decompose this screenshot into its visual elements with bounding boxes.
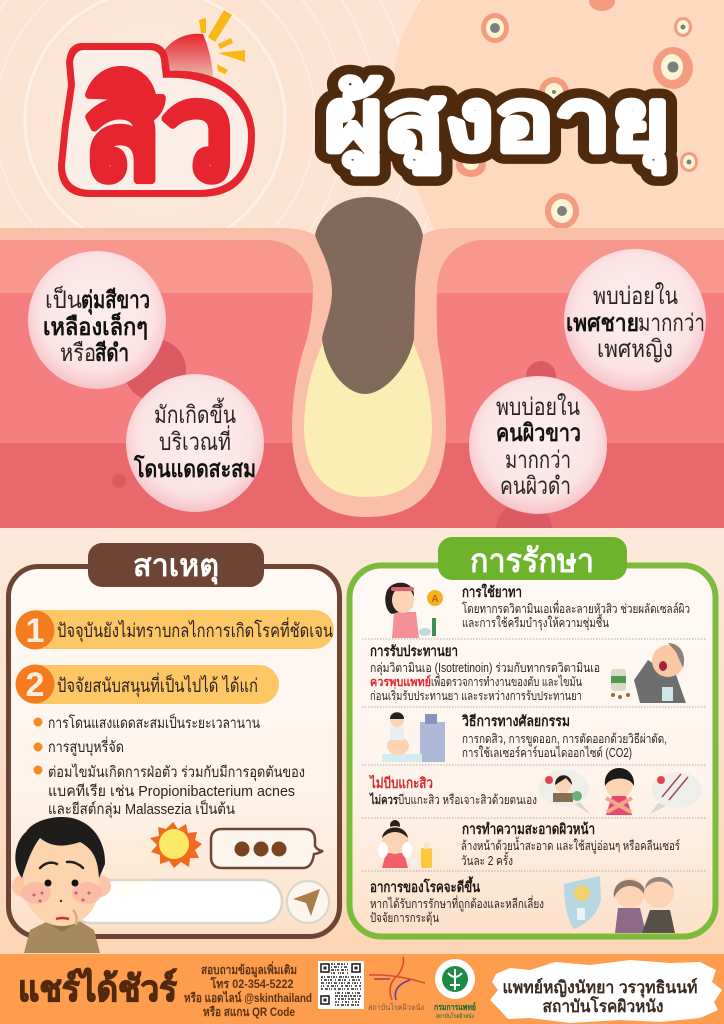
icon: woman applying cream: A xyxy=(431,594,439,605)
treatment dividers xyxy=(362,639,707,871)
callout bubble: sun-exposed areas: บริเวณที่ xyxy=(159,425,231,456)
QR code xyxy=(318,961,364,1009)
cause 2: ปัจจัยสนับสนุนที่เป็นไปได้ ได้แก่ xyxy=(57,672,258,698)
treatment: surgical procedures: การใช้เลเซอร์คาร์บอนไดออกไซด์ (CO2) xyxy=(462,746,632,760)
logo: Department of Medical Services xyxy=(434,959,476,1020)
treatment: do not squeeze: บีบแกะสิว หรือเจาะสิวด้วยตนเอง xyxy=(398,793,537,807)
heading: treatment xyxy=(438,537,627,580)
treatment: face cleansing: วันละ 2 ครั้ง xyxy=(461,851,513,868)
author credit on white brush stroke: สถาบันโรคผิวหนัง xyxy=(542,996,664,1016)
footer band xyxy=(0,954,724,1024)
treatment: surgical procedures: การกดสิว, การขูดออก, การตัดออกด้วยวิธีผ่าตัด, xyxy=(462,732,667,747)
treatment: oral medication: การรับประทานยา xyxy=(370,644,458,660)
callout bubble: white-yellow bumps: เป็น xyxy=(45,285,82,314)
logo: Institute of Dermatology xyxy=(368,957,425,1012)
cause 1 xyxy=(16,610,334,650)
treatment: oral medication xyxy=(370,644,600,703)
callout bubble: sun-exposed areas: โดนแดดสะสม xyxy=(133,454,256,483)
treatment: oral medication: ควรพบแพทย์ xyxy=(370,674,431,689)
icon: woman washing face xyxy=(378,820,432,868)
footer contact info: หรือ สแกน QR Code xyxy=(203,1005,295,1019)
icon: no squeezing illustrations xyxy=(539,768,702,815)
icon: shield and happy elderly couple xyxy=(564,876,675,933)
treatment: surgical procedures: วิธีการทางศัลยกรรม xyxy=(461,713,570,730)
treatment: topical medication: การใช้ยาทา xyxy=(462,583,522,601)
footer contact info: หรือ แอดไลน์ @skinthailand xyxy=(184,990,312,1005)
callout bubble: white-yellow bumps: เหลืองเล็กๆ xyxy=(43,312,148,341)
treatment: oral medication: เพื่อตรวจการทำงานของตับ และไขมัน xyxy=(431,673,582,689)
callout bubble: white-yellow bumps xyxy=(28,251,166,389)
heading: causes: สาเหตุ xyxy=(133,548,219,585)
treatment: do not squeeze xyxy=(368,774,537,807)
contributing factor list: และยีสต์กลุ่ม Malassezia เป็นต้น xyxy=(48,799,235,819)
title: สิว xyxy=(58,10,255,206)
title: ผู้สูงอายุ: ผู้สูงอายุ xyxy=(324,73,670,174)
cause 1: ปัจจุบันยังไม่ทราบกลไกการเกิดโรคที่ชัดเจน xyxy=(57,617,333,643)
cause 2 xyxy=(16,664,279,704)
icon: elderly man taking pills xyxy=(611,643,686,703)
callout bubble: more common in fair skin: คนผิวดำ xyxy=(500,473,571,500)
callout bubble: more common in men: พบบ่อยใน xyxy=(593,282,678,310)
footer contact info: โทร 02-354-5222 xyxy=(210,976,294,991)
background: concentric arcs and glow xyxy=(0,0,445,410)
callout bubble: more common in men: มากกว่า xyxy=(638,310,705,337)
title: ผู้สูงอายุ: ผู้สูงอายุ xyxy=(324,73,670,174)
contributing factor list: การสูบบุหรี่จัด xyxy=(48,736,124,757)
treatment: face cleansing xyxy=(461,821,680,868)
panel: skin surface with pimples xyxy=(393,0,724,232)
logo: Department of Medical Services: กรมการแพทย์ xyxy=(434,1001,476,1012)
logo: Department of Medical Services: สถาบันโรคผิวหนัง xyxy=(436,1012,474,1020)
contributing factor list: แบคทีเรีย เช่น Propionibacterium acnes xyxy=(48,783,295,800)
callout bubble: sun-exposed areas xyxy=(126,374,264,512)
treatment: improving outcome: หากได้รับการรักษาที่ถูกต้องและหลีกเลี่ยง xyxy=(370,895,544,912)
contributing factor list: การโดนแสงแดดสะสมเป็นระยะเวลานาน xyxy=(48,713,260,732)
treatment: topical medication xyxy=(462,583,690,631)
illustration: worried man with acne xyxy=(12,817,111,953)
chat input box xyxy=(70,880,329,923)
callout bubble: more common in men: เพศหญิง xyxy=(597,336,673,363)
lower section background xyxy=(0,532,724,954)
icon: sun xyxy=(100,822,202,905)
treatment: oral medication: ก่อนเริ่มรับประทานยา และระหว่างการรับประทานยา xyxy=(370,687,582,703)
cause 1: 1 xyxy=(26,612,44,650)
callout bubble: white-yellow bumps: ตุ่มสีขาว xyxy=(81,287,150,316)
treatment: improving outcome xyxy=(370,876,544,926)
callout bubble: more common in fair skin xyxy=(469,376,607,514)
heading: treatment: การรักษา xyxy=(470,542,594,579)
treatment: do not squeeze: ไม่ควร xyxy=(368,792,398,807)
heading: causes xyxy=(88,543,264,587)
callout bubble: more common in fair skin: พบบ่อยใน xyxy=(496,393,580,421)
footer contact info xyxy=(184,961,312,1019)
chat bubble with three dots xyxy=(211,829,323,868)
panel: causes xyxy=(8,543,340,953)
callout bubble: more common in men xyxy=(564,249,706,391)
treatment: surgical procedures xyxy=(461,713,667,760)
callout bubble: sun-exposed areas: มักเกิดขึ้น xyxy=(154,397,236,429)
contributing factor list xyxy=(34,713,305,819)
author credit on white brush stroke: แพทย์หญิงนัทยา วรวุทธินนท์ xyxy=(502,977,698,998)
author credit on white brush stroke xyxy=(490,960,722,1023)
callout bubble: white-yellow bumps: สีดำ xyxy=(95,340,129,367)
callout bubble: more common in fair skin: มากกว่า xyxy=(505,447,571,474)
diagram: skin cross-section with clogged follicle xyxy=(0,197,724,558)
treatment: face cleansing: การทำความสะอาดผิวหน้า xyxy=(462,821,595,838)
panel: treatment xyxy=(350,537,716,936)
treatment: improving outcome: ปัจจัยการกระตุ้น xyxy=(370,911,439,926)
treatment: oral medication: กลุ่มวิตามินเอ (Isotretinoin) ร่วมกับทากรดวิตามินเอ xyxy=(370,661,600,676)
callout bubble: more common in men: เพศชาย xyxy=(566,310,639,337)
title: สิว: สิว xyxy=(84,59,234,206)
treatment: topical medication: และการใช้ครีมบำรุงให้ความชุ่มชื้น xyxy=(462,613,609,631)
callout bubble: more common in fair skin: คนผิวขาว xyxy=(496,420,581,447)
treatment: improving outcome: อาการของโรคจะดีขึ้น xyxy=(370,876,480,896)
icon: patient receiving laser treatment xyxy=(382,712,445,762)
callout bubble: white-yellow bumps: หรือ xyxy=(60,340,96,367)
treatment: do not squeeze: ไม่บีบแกะสิว xyxy=(368,774,433,792)
contributing factor list: ต่อมไขมันเกิดการฝ่อตัว ร่วมกับมีการอุดตันของ xyxy=(48,763,305,782)
footer slogan: แชร์ได้ชัวร์ xyxy=(18,967,178,1009)
icon: woman applying cream xyxy=(385,583,443,638)
footer contact info: สอบถามข้อมูลเพิ่มเติม xyxy=(201,961,297,978)
cause 2: 2 xyxy=(26,666,44,704)
logo: Institute of Dermatology: สถาบันโรคผิวหนัง xyxy=(368,1002,424,1012)
